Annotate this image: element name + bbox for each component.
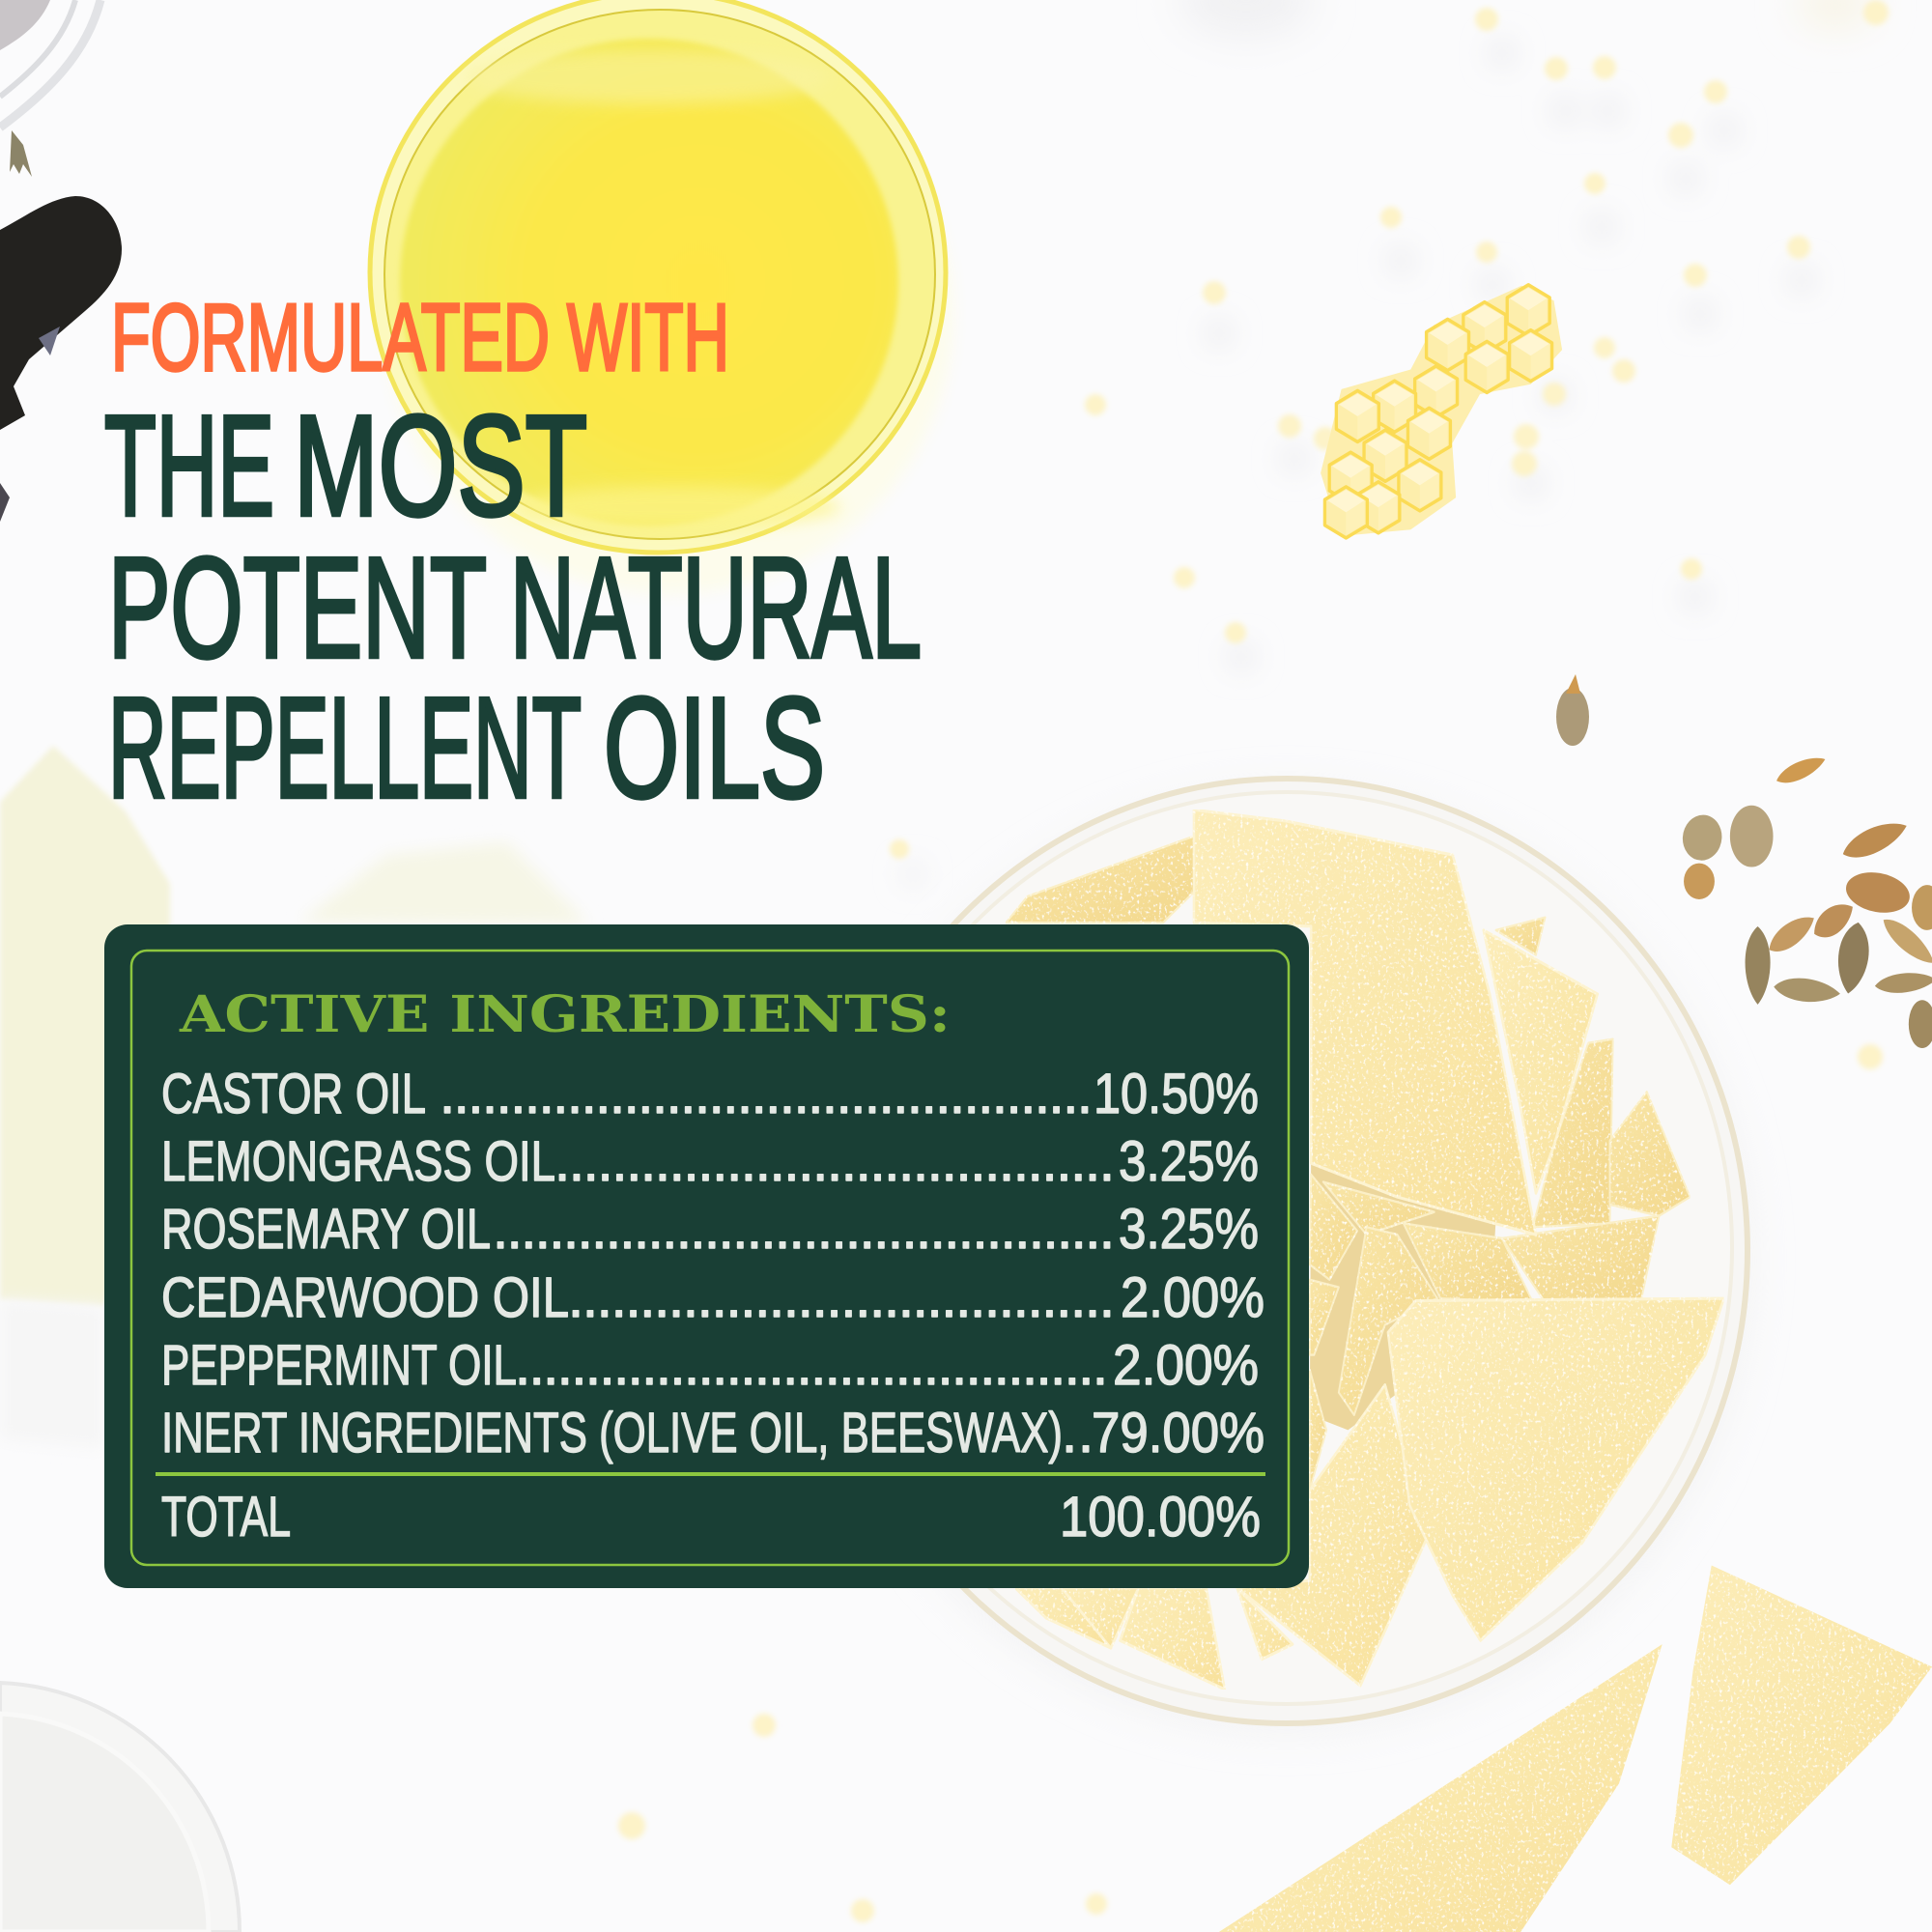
row: peppermint oil: PEPPERMINT OIL — [161, 1334, 517, 1397]
icon: single seed — [1556, 674, 1589, 746]
row: inert ingredients: INERT INGREDIENTS (OLIVE OIL, BEESWAX) — [161, 1402, 1063, 1464]
total row: TOTAL — [161, 1486, 291, 1548]
icon: bowl of wax chunks — [820, 779, 1932, 1932]
headline: REPELLENT — [108, 668, 582, 828]
headline: NATURAL — [510, 528, 922, 688]
eyebrow: formulated with: FORMULATED — [111, 284, 550, 390]
row: rosemary oil: ROSEMARY OIL — [161, 1198, 491, 1261]
row: lemongrass oil: 3.25% — [1119, 1130, 1259, 1193]
headline: THE — [104, 386, 274, 546]
total row — [161, 1486, 1261, 1548]
icon: glass dish top left — [0, 0, 100, 177]
row: peppermint oil — [161, 1334, 1259, 1397]
icon: honeycomb piece — [1321, 285, 1562, 538]
pale wax chunks on the left — [0, 746, 589, 1449]
row: cedarwood oil: CEDARWOOD OIL — [161, 1266, 569, 1329]
headline: MOST — [294, 386, 587, 546]
row: cedarwood oil — [161, 1266, 1264, 1329]
icon: bowl of yellow oil — [370, 0, 953, 594]
row: peppermint oil: .......................................... — [515, 1334, 1108, 1397]
row: lemongrass oil: LEMONGRASS OIL — [161, 1130, 555, 1193]
wax pieces — [1006, 810, 1932, 1932]
row: cedarwood oil: 2.00% — [1121, 1266, 1264, 1329]
icon: black dropper — [0, 196, 122, 522]
total row: 100.00% — [1060, 1486, 1261, 1548]
row: inert ingredients: 79.00% — [1092, 1402, 1264, 1464]
row: cedarwood oil: ...................................... — [568, 1266, 1115, 1329]
top soft shadows — [1179, 0, 1874, 39]
scattered beeswax pellets — [618, 0, 1889, 1922]
icon: small white dish bottom left — [0, 1683, 240, 1932]
row: rosemary oil: 3.25% — [1119, 1198, 1259, 1261]
eyebrow: formulated with: WITH — [567, 284, 729, 390]
divider — [156, 1472, 1265, 1476]
row: castor oil: CASTOR OIL — [161, 1063, 426, 1125]
ingredient rows — [161, 1063, 1264, 1464]
headline — [104, 386, 922, 828]
panel: active ingredients — [104, 924, 1309, 1588]
row: rosemary oil: ............................................ — [493, 1198, 1115, 1261]
row: inert ingredients: .. — [1062, 1402, 1094, 1464]
row: castor oil: 10.50% — [1094, 1063, 1259, 1125]
row: castor oil — [161, 1063, 1259, 1125]
row: castor oil: .............................................. — [440, 1063, 1093, 1125]
row: lemongrass oil: ....................................... — [554, 1130, 1115, 1193]
title — [104, 284, 922, 828]
icon: sunflower seeds — [1677, 752, 1932, 1048]
headline: OILS — [604, 668, 825, 828]
row: peppermint oil: 2.00% — [1113, 1334, 1259, 1397]
row: lemongrass oil — [161, 1130, 1259, 1193]
row: rosemary oil — [161, 1198, 1259, 1261]
wax chunks outside the bowl — [1218, 1565, 1932, 1932]
headline: POTENT — [108, 528, 487, 688]
panel heading: ACTIVE INGREDIENTS: — [179, 985, 951, 1044]
